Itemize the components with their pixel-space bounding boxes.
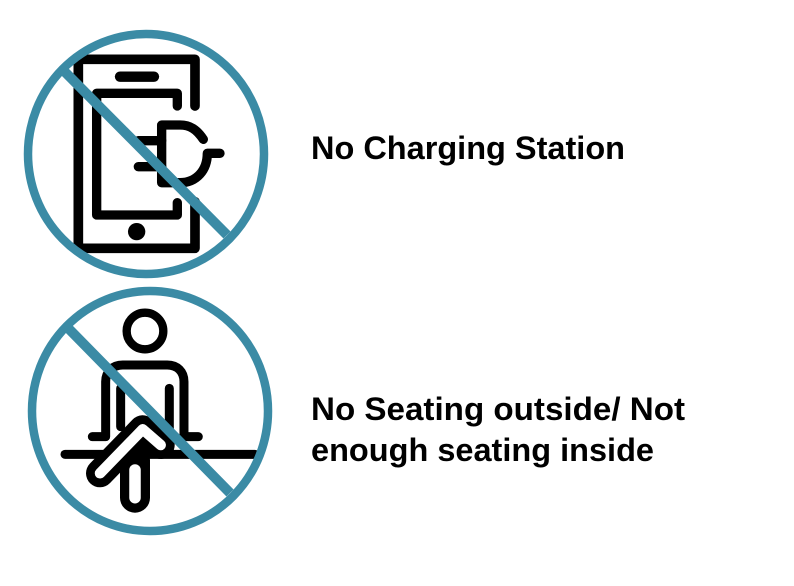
icon: no seating [32, 291, 268, 531]
label: no seating: enough seating inside [311, 432, 654, 468]
label: no seating: No Seating outside/ Not [311, 391, 685, 427]
icon: no charging station [28, 34, 264, 274]
label: no charging station: No Charging Station [311, 130, 625, 166]
label: no seating [311, 391, 685, 468]
